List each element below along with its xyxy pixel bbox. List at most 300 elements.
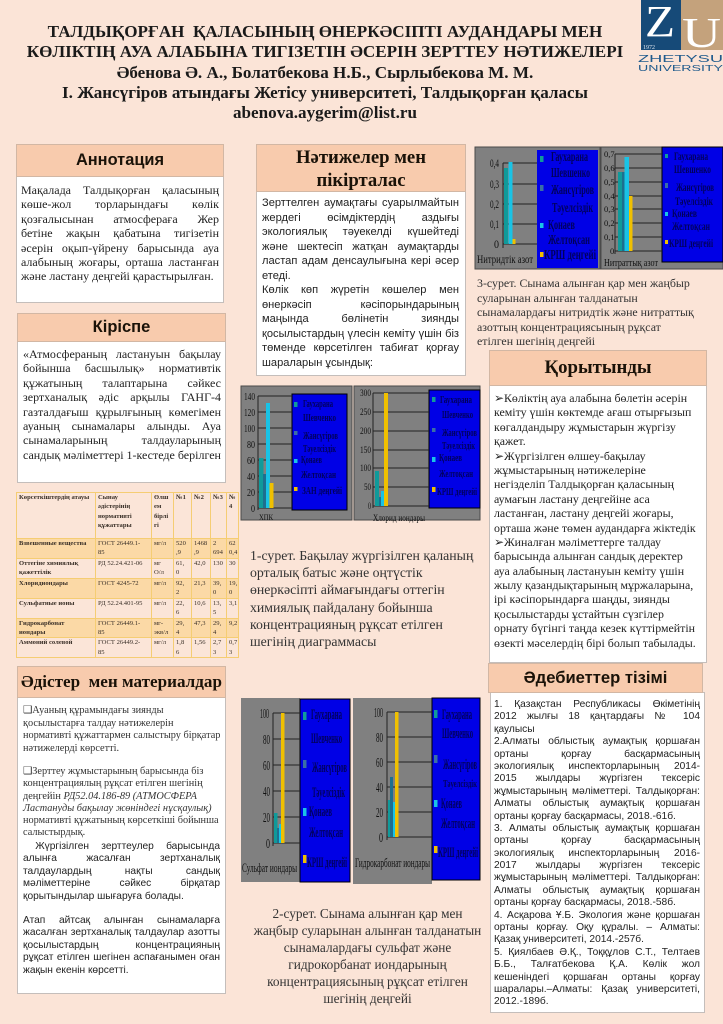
chart: nitrate nitrogen: 0,2: [604, 218, 615, 228]
data table: 0: [229, 589, 232, 596]
chart: nitrate nitrogen: 0,5: [604, 177, 615, 187]
data table: О/л: [154, 569, 164, 576]
results heading: пікірталас: [316, 170, 406, 190]
abstract text: көше-жол торларындағы көлік: [21, 197, 219, 211]
chart: bicarbonate ions: 80: [376, 731, 383, 746]
data table: ГОСТ 26449.1-: [98, 540, 140, 547]
panel: results and discussion: [256, 144, 466, 376]
data table: Сульфатные ионы: [19, 600, 74, 607]
panel: methods and materials: [17, 666, 226, 994]
data table: №2: [194, 494, 204, 501]
data table: 10,6: [194, 600, 206, 607]
methods text: serif paragraph 1: ❑Ауаның құрамындағы зиянды: [23, 705, 164, 716]
abstract text: және ластану деңгейі қарастырылған.: [21, 269, 214, 283]
references text: қаулысы: [494, 724, 535, 735]
methods text: serif paragraph 2: нормативті құжатының көрсеткіші бойынша: [23, 815, 219, 826]
chart: sulfate ions: 60: [263, 759, 270, 774]
chart: nitrite nitrogen: 0: [494, 237, 499, 251]
chart: nitrate nitrogen: 0,7: [604, 149, 615, 159]
chart: nitrite nitrogen: 0,2: [490, 197, 499, 211]
caption: figure 2: концентрациясының рұқсат етілген: [267, 974, 468, 989]
data table: экв/л: [154, 629, 168, 636]
references text: кешеніндегі қоршаған ортаны қорғау: [494, 972, 700, 983]
references text: Алматы облыстық аумақтық қоршаған: [494, 798, 700, 809]
data table: 4: [213, 629, 216, 636]
abstract text: әсерін оқып-үйрену барысында ауа: [21, 241, 219, 255]
data table: бірлі: [154, 513, 168, 520]
caption: figure 3: етілген шегінің деңгейі: [477, 334, 595, 348]
chart: nitrite nitrogen: Желтоқсан: [548, 233, 590, 248]
data table: мг-: [154, 620, 163, 627]
data table: 13,: [213, 600, 221, 607]
panel: abstract: [16, 144, 224, 303]
data table: 30: [229, 560, 236, 567]
caption: figure 1: өнеркәсіпті аймағындағы оттегін: [250, 582, 445, 597]
chart: chemical oxygen demand: ЗАН деңгейі: [302, 485, 342, 497]
methods heading: Әдістер мен материалдар: [21, 672, 222, 691]
chart: chemical oxygen demand: 140: [244, 392, 255, 403]
chart: chloride ions: 0: [368, 501, 371, 511]
references text: 1. Қазақстан Республикасы Өкіметінің: [494, 699, 700, 710]
data table: 9,2: [229, 620, 237, 627]
caption: figure 1: 1-сурет. Бақылау жүргізілген қаланың: [250, 548, 473, 563]
chart: nitrate nitrogen: 0: [610, 246, 614, 256]
chart: chemical oxygen demand: Жансүгіров: [303, 430, 338, 442]
references text: ортаны қорғау басқармасы, 2018.-58б.: [494, 897, 676, 908]
chart: chemical oxygen demand: [241, 386, 352, 522]
results text: маңында бөлінетін зиянды: [262, 313, 459, 325]
chart: nitrate nitrogen: Нитраттық азот: [604, 257, 658, 269]
methods text: sans paragraph 2: рұқсат етілген шегінен аспағанымен оған: [23, 952, 220, 963]
caption: figure 2: жаңбыр суларынан алынған талданатын: [254, 923, 481, 938]
references heading: [488, 663, 703, 693]
data table: 1468: [194, 540, 207, 547]
data table: Гидрокарбонат: [19, 620, 64, 627]
data table: 0,4: [229, 549, 237, 556]
data table: иондары: [19, 629, 45, 636]
logo: Zhetysu University: U: [682, 11, 721, 57]
references heading: Әдебиеттер тізімі: [524, 668, 667, 687]
chart: nitrate nitrogen: [601, 147, 723, 269]
caption: figure 3: азоттың концентрациясының рұқсат: [477, 320, 661, 334]
data table: №3: [213, 494, 223, 501]
references text: ортаны қорғау басқармасының: [494, 749, 700, 760]
conclusion body: [489, 385, 707, 663]
data table: 694: [213, 549, 223, 556]
data table: мг/л: [154, 580, 166, 587]
methods text: serif paragraph 2: [22, 766, 219, 838]
conclusion text: көгалдандыру жұмыстарын жүргізу: [494, 420, 676, 434]
data table: 61,: [176, 560, 184, 567]
references text: 3. Алматы облыстық аумақтық қоршаған: [494, 823, 700, 834]
chart: nitrate nitrogen: 0,3: [604, 204, 615, 214]
charts: six pollutant bar charts: КРШ деңгейі: [438, 845, 478, 861]
data table: Көрсеткіштердің атауы: [19, 494, 89, 501]
chart: chloride ions: 50: [364, 482, 371, 492]
caption: figure 1: химиялық пайдалану бойынша: [250, 600, 433, 615]
data table: 3: [229, 649, 232, 656]
logo: Zhetysu University: 1972: [643, 45, 655, 51]
methods text: sans paragraph 1: Жүргізілген зерттеулер барысында: [35, 841, 220, 852]
chart: chloride ions: 250: [360, 407, 371, 417]
methods text: sans paragraph 2: Атап айтсақ алынған сынамаларға: [23, 915, 220, 926]
references body: [490, 692, 705, 1013]
charts: six pollutant bar charts: Жансүгіров: [443, 757, 477, 773]
chart: nitrite nitrogen: КРШ деңгейі: [544, 248, 596, 263]
methods text: serif paragraph 2: ❑Зерттеу жұмыстарының барысында біз: [23, 766, 203, 777]
chart: nitrite nitrogen: [475, 147, 600, 269]
conclusion text: жұмыстарының нәтижелеріне: [494, 463, 646, 477]
data table: 1,8: [176, 639, 184, 646]
methods text: sans paragraph 1: [23, 841, 220, 902]
data table: мг: [154, 560, 161, 567]
introduction text: газталдағыш құрылғының көмегімен: [23, 405, 221, 419]
results text: [262, 197, 459, 368]
chart: nitrate nitrogen: 0,6: [604, 163, 615, 173]
introduction text: ауаның сынамалары алынды. Ауа: [23, 419, 221, 433]
chart: chloride ions: 200: [360, 426, 371, 436]
results text: шараларын ұсындық:: [262, 356, 373, 368]
chart: sulfate ions: 40: [263, 785, 270, 800]
caption: figure 2: гидрокорбанат иондарының: [288, 957, 447, 972]
introduction text: сандық мәліметтері 1-кестеде берілген: [23, 448, 221, 462]
data table: 22,: [176, 600, 184, 607]
data table: Өлш: [154, 494, 168, 501]
chart: sulfate ions: [241, 698, 350, 882]
introduction text: [23, 347, 221, 462]
data table: 29,: [176, 620, 184, 627]
references text: 2012 жылғы 18 қаңтардағы № 104: [494, 711, 700, 722]
data table: құжаттары: [98, 522, 132, 529]
chart: chloride ions: Желтоқсан: [439, 468, 473, 480]
methods text: sans paragraph 1: талдаулардың нақты сандық: [23, 866, 220, 877]
data table: [16, 492, 239, 658]
chart: chemical oxygen demand: 100: [244, 424, 255, 435]
caption: figure 2: сынамалардағы сульфат және: [284, 940, 451, 955]
conclusion text: ластанған, ластану деңгейі жоғары,: [494, 506, 674, 520]
methods text: serif paragraph 1: нәтижелерді көрсетті.: [23, 742, 119, 754]
data table: 2,7: [213, 639, 221, 646]
introduction body: [17, 341, 226, 483]
references text: ортаны қорғау басқармасы, 2018.-61б.: [494, 811, 676, 822]
abstract heading: Аннотация: [76, 151, 164, 169]
introduction text: бойынша басшылық» нормативтік: [23, 361, 221, 375]
results text: қосылыстардың үлесін кеміту үшін біз: [262, 328, 459, 340]
results text: етеді.: [262, 270, 291, 282]
methods heading: [17, 666, 226, 698]
data table: 85: [98, 629, 105, 636]
chart: chloride ions: Жансүгіров: [442, 427, 477, 439]
methods text: serif paragraph 1: қосылыстарға талдау нәтижелерін: [23, 718, 174, 728]
chart: chemical oxygen demand: 0: [251, 504, 255, 515]
chart: chemical oxygen demand: Желтоқсан: [301, 469, 336, 481]
methods text: sans paragraph 2: [23, 915, 220, 976]
conclusion text: қосылыстарды ұстайтын сүзгілер: [494, 607, 664, 621]
methods text: sans paragraph 1: алынға жасалған зертханалық: [23, 853, 220, 864]
data table: 85: [98, 649, 105, 656]
introduction heading: Кіріспе: [93, 318, 150, 336]
chart: chloride ions: Тәуелсіздік: [442, 440, 475, 452]
chart: sulfate ions: 80: [263, 733, 270, 748]
introduction text: құжатының талаптарына сәйкес: [23, 376, 221, 390]
title block: КӨЛІКТІҢ АУА АЛАБЫНА ТИГІЗЕТІН ӘСЕРІН ЗЕРТТЕУ НӘТИЖЕЛЕРІ: [27, 42, 623, 61]
conclusion text: кеміту үшін көктемде ағаш отырғызып: [494, 405, 691, 419]
chart: chemical oxygen demand: Қонаев: [301, 454, 322, 466]
data table: Оттегіне химиялық: [19, 560, 78, 567]
caption: figure 1: концентрацияның рұқсат етілген: [250, 617, 443, 632]
data table: №1: [176, 494, 186, 501]
introduction text: зертханалық әдіс арқылы ГАНГ-4: [23, 390, 221, 404]
data table: 520: [176, 540, 186, 547]
title block: І. Жансүгіров атындағы Жетісу университеті, Талдықорған қаласы: [62, 83, 588, 102]
results text: жердегі өсімдіктердің аздығы: [262, 212, 459, 224]
references text: ортаны қорғау басқармасының: [494, 835, 700, 846]
abstract heading: [16, 144, 224, 177]
data table: Аммоний солевой: [19, 639, 72, 646]
data table: 130: [213, 560, 223, 567]
references text: 5. Қиялбаев Ә.Қ., Тоққұлов С.Т., Телтаев: [494, 947, 700, 958]
chart: chloride ions: Қонаев: [439, 452, 462, 464]
chart: sulfate ions: Сульфат иондары: [242, 860, 297, 875]
data table: ,9: [176, 549, 181, 556]
chart: chloride ions: [354, 386, 480, 523]
caption: figure 1: [250, 548, 474, 649]
data table: 62: [229, 540, 236, 547]
caption: figure 1: шегінің диаграммасы: [250, 634, 376, 649]
chart: chemical oxygen demand: 120: [244, 408, 255, 419]
data table: РД 52.24.421-06: [98, 560, 142, 567]
data table: 42,0: [194, 560, 206, 567]
conclusion text: өзекті мәселердің бірі болып табылады.: [494, 636, 696, 650]
chart: bicarbonate ions: 0: [379, 831, 383, 846]
conclusion text: орташа және төмен аудандарға жіктедік: [494, 521, 696, 535]
chart: chemical oxygen demand: 40: [247, 472, 255, 483]
results text: және шектесіп жатқан аумақтарды: [262, 240, 459, 252]
references text: 2017 жылдары жүргізген тексеріс: [494, 860, 700, 871]
chart: nitrite nitrogen: Тәуелсіздік: [552, 201, 594, 216]
results text: Зерттелген аумақтағы суарылмайтын: [262, 197, 459, 209]
conclusion text: барысында алынған сандық деректер: [494, 549, 683, 563]
abstract text: бетіне жақын қабатына тигізетін: [21, 226, 219, 240]
references text: экологиялық инспекторларының 2016-: [494, 848, 700, 859]
chart: chemical oxygen demand: 80: [247, 440, 255, 451]
abstract text: қозғалысынан атмосфераға Жер: [21, 212, 219, 226]
conclusion text: негізделіп Талдықорған қаласының: [494, 477, 674, 491]
chart: bicarbonate ions: Тәуелсіздік: [443, 779, 477, 790]
references text: 2.Алматы облыстық аумақтық қоршаған: [494, 736, 700, 747]
introduction heading: [17, 313, 226, 342]
chart: chloride ions: 300: [360, 388, 371, 398]
data table: 0: [176, 569, 179, 576]
references text: жұмыстарының мәліметтері. Талдықорған:: [494, 872, 700, 883]
title block: abenova.aygerim@list.ru: [233, 103, 417, 122]
chart: nitrite nitrogen: Нитридтік азот: [477, 252, 534, 266]
chart: sulfate ions: 0: [266, 837, 270, 852]
data table: 4: [176, 629, 179, 636]
chart: bicarbonate ions: Шевченко: [442, 726, 473, 742]
references text: [494, 699, 700, 1007]
methods text: serif paragraph 2: салыстырдық.: [23, 827, 85, 838]
conclusion text: аумағын ластану деңгейіне аса: [494, 492, 650, 506]
conclusion text: [494, 391, 696, 650]
methods text: sans paragraph 1: қорытындылар шығаруға болады.: [23, 891, 184, 902]
data table: Хлоридиондары: [19, 580, 68, 587]
chart: bicarbonate ions: Желтоқсан: [441, 816, 475, 832]
data table: нормативті: [98, 513, 132, 520]
chart: sulfate ions: Гаухарана: [311, 707, 342, 723]
data table: РД 52.24.401-95: [98, 600, 142, 607]
data table: 3,1: [229, 600, 237, 607]
chart: nitrite nitrogen: Гаухарана: [551, 150, 588, 165]
introduction text: сынамаларының талдауларының: [23, 433, 221, 447]
results heading: Нәтижелер мен: [296, 146, 426, 168]
chart: chemical oxygen demand: 60: [247, 456, 255, 467]
abstract text: [20, 183, 219, 283]
chart: nitrite nitrogen: 0,3: [490, 177, 499, 191]
conclusion heading: Қорытынды: [544, 357, 652, 378]
caption: figure 1: орталық батыс және оңтүстік: [250, 565, 423, 580]
data table: 4: [229, 503, 232, 510]
references text: 2012.-189б.: [494, 996, 549, 1007]
chart: nitrite nitrogen: Қонаев: [548, 218, 575, 233]
chart: sulfate ions: Шевченко: [311, 731, 342, 747]
logo: Zhetysu University: [638, 0, 723, 73]
results text: ластап адам денсаулығына кері әсер: [262, 255, 459, 267]
chart: bicarbonate ions: [353, 698, 480, 884]
chart: sulfate ions: 100: [260, 707, 269, 722]
panel: conclusion: [489, 350, 707, 663]
chart: nitrate nitrogen: 0,4: [604, 191, 615, 201]
data table: ГОСТ 26449.2-: [98, 639, 140, 646]
charts: six pollutant bar charts: Жансүгіров: [312, 760, 347, 776]
references text: шаралары.–Алматы: Қазақ университеті,: [494, 984, 700, 995]
title block: Әбенова Ә. А., Болатбекова Н.Б., Сырлыбекова М. М.: [117, 63, 533, 82]
chart: sulfate ions: Желтоқсан: [309, 825, 343, 841]
data table: 29,: [213, 620, 221, 627]
logo: Zhetysu University: ZHETYSU: [638, 53, 723, 65]
data table: ГОСТ 4245-72: [98, 580, 139, 587]
data table: 0,7: [229, 639, 237, 646]
data table: 39,: [213, 580, 221, 587]
chart: nitrate nitrogen: Қонаев: [672, 208, 697, 220]
chart: nitrite nitrogen: 0,4: [490, 156, 499, 170]
references text: ортаны қорғау. Оқу құралы. – Алматы:: [494, 922, 700, 933]
abstract text: алабының жоғары, орташа ластанған: [21, 255, 219, 269]
chart: nitrite nitrogen: Жансүгіров: [551, 183, 594, 198]
chart: chloride ions: Хлорид иондары: [373, 513, 425, 523]
data table: 3: [213, 649, 216, 656]
methods text: serif paragraph 1: [23, 705, 220, 754]
chart: bicarbonate ions: Гаухарана: [442, 707, 472, 723]
methods text: serif paragraph 2: деңгейін РД52.04.186-89 (АТМОСФЕРА: [23, 791, 197, 802]
introduction text: «Атмосфераның ластануын бақылау: [23, 347, 221, 361]
chart: chemical oxygen demand: ХПК: [259, 513, 274, 522]
references text: Алматы облыстық аумақтық қоршаған: [494, 885, 700, 896]
data table: ,9: [194, 549, 199, 556]
conclusion text: ➢Жүргізілген өлшеу-бақылау: [494, 449, 646, 463]
chart: nitrite nitrogen: 0,1: [490, 217, 499, 231]
data table: 19,: [229, 580, 237, 587]
caption: figure 2: [254, 906, 481, 1006]
conclusion text: ➢Көліктің ауа алабына бөлетін әсерін: [494, 391, 687, 405]
panel: references: [488, 663, 705, 1013]
chart: chemical oxygen demand: Шевченко: [303, 412, 336, 424]
chart: chloride ions: КРШ деңгейі: [437, 486, 477, 498]
title block: [27, 22, 623, 122]
conclusion text: ➢Жиналған мәліметтерге талдау: [494, 535, 661, 549]
chart: bicarbonate ions: Қонаев: [441, 796, 462, 812]
results text: экологиялық тәуекелді күшейтеді: [262, 226, 459, 238]
data table: 2: [213, 540, 216, 547]
results text: өнеркәсіп кәсіпорындарының: [262, 298, 459, 310]
caption: figure 3: [477, 276, 694, 348]
data table: 92,: [176, 580, 184, 587]
data table: 0: [213, 589, 216, 596]
caption: figure 3: 3-сурет. Сынама алынған қар мен жаңбыр: [477, 276, 690, 290]
title block: ТАЛДЫҚОРҒАН ҚАЛАСЫНЫҢ ӨНЕРКӘСІПТІ АУДАНДАРЫ МЕН: [48, 22, 602, 41]
chart: sulfate ions: Қонаев: [309, 804, 332, 820]
chart: bicarbonate ions: 20: [376, 806, 383, 821]
methods text: serif paragraph 2: концентрациялың рұқсат етілген шегінің: [23, 778, 203, 789]
conclusion heading: [489, 350, 707, 386]
abstract text: Мақалада Талдықорған қаласының: [21, 183, 219, 197]
results heading: [256, 144, 466, 192]
conclusion text: ауа алабының ластануын кеміту үшін: [494, 564, 684, 578]
methods body: [17, 696, 226, 994]
chart: chemical oxygen demand: Гаухарана: [303, 398, 333, 410]
conclusion text: орнату бүгінгі таңда кезек күттірмейтін: [494, 621, 695, 635]
data table: 85: [98, 549, 105, 556]
results text: Көлік көп жүретін көшелер мен: [262, 284, 459, 296]
data table: мг/л: [154, 540, 166, 547]
references text: экологиялық инспекторларының 2014-: [494, 761, 700, 772]
chart: chloride ions: 150: [360, 445, 371, 455]
references text: 2015 жылдары жүргізген тексеріс: [494, 773, 700, 784]
data table: 6: [176, 609, 179, 616]
chart: bicarbonate ions: 60: [376, 756, 383, 771]
caption: figure 2: шегінің деңгейі: [323, 991, 412, 1006]
abstract body: [16, 176, 224, 303]
methods text: sans paragraph 1: мәліметтеріне сәйкес бірқатар: [23, 878, 220, 889]
chart: chemical oxygen demand: 20: [247, 488, 255, 499]
data table: Сынау: [98, 494, 118, 501]
methods text: serif paragraph 2: Ластануды бақылау жөніндегі нұсқаулық): [23, 803, 212, 814]
data table: Взвешенные вещества: [19, 540, 86, 547]
chart: chloride ions: Гаухарана: [440, 394, 472, 406]
caption: figure 3: сынамалардағы нитридтік және нитраттық: [477, 305, 694, 319]
data table: қажеттілік: [19, 569, 51, 576]
methods text: sans paragraph 2: жасалған зертханалық талдаулар азотты: [23, 927, 220, 938]
data table: әдістерінің: [98, 503, 130, 510]
logo: Zhetysu University: UNIVERSITY: [638, 64, 723, 73]
data table: 47,3: [194, 620, 206, 627]
data table: мг/л: [154, 639, 166, 646]
chart: chloride ions: Шевченко: [442, 409, 473, 421]
chart: chloride ions: 100: [360, 463, 371, 473]
caption: figure 3: суларынан алынған талданатын: [477, 290, 638, 304]
data table: 1,56: [194, 639, 206, 646]
conclusion text: жылу қазандықтарының мұржаларына,: [494, 578, 693, 592]
references text: 4. Асқарова Ұ.Б. Экология және қоршаған: [494, 910, 700, 921]
panel: introduction: [17, 313, 226, 483]
chart: chemical oxygen demand: Тәуелсіздік: [303, 443, 336, 455]
chart: bicarbonate ions: 100: [374, 706, 383, 721]
conclusion text: қажет.: [494, 434, 526, 448]
chart: nitrite nitrogen: Шевшенко: [551, 166, 590, 181]
references text: Б.Б., Талғатбекова Қ.А. Көлік жол: [494, 959, 700, 970]
results text: төменде көрсетілген табиғат қорғау: [262, 342, 459, 354]
caption: figure 2: 2-сурет. Сынама алынған қар мен: [272, 906, 463, 921]
